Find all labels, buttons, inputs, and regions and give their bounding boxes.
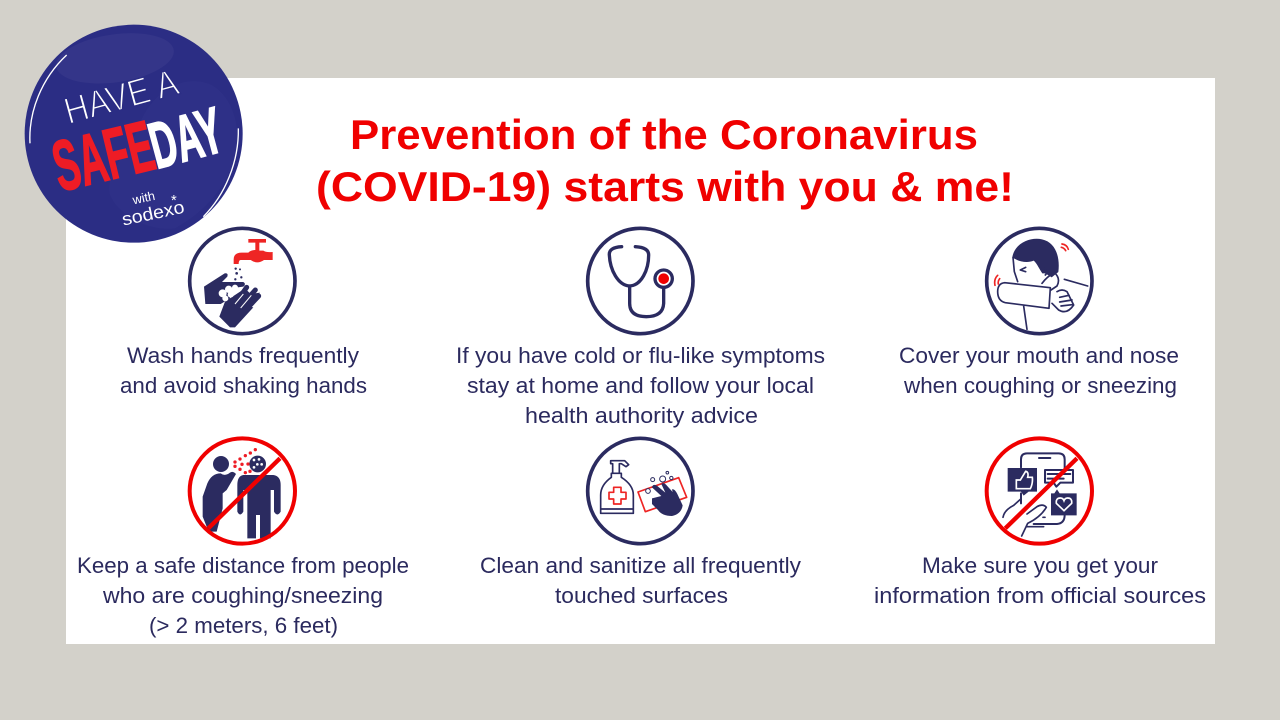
badge: Have a Safe Day with Sodexo: sodexo: [120, 197, 186, 230]
text: safe distance: Keep a safe distance from people: [77, 553, 409, 578]
icon: no close contact with coughing people: [190, 438, 295, 544]
text: stay at home: health authority advice: [525, 403, 758, 428]
text: cover mouth: Cover your mouth and nose: [899, 343, 1179, 368]
text: clean and sanitize: [480, 553, 801, 608]
text: stay at home: stay at home and follow your local: [467, 373, 814, 398]
text: cover mouth: [899, 343, 1179, 398]
badge: Have a Safe Day with Sodexo: *: [171, 193, 177, 209]
badge: Have a Safe Day with Sodexo: with: [130, 189, 156, 207]
text: wash hands: [120, 343, 367, 398]
title: Prevention of the Coronavirus: [350, 111, 978, 158]
text: clean and sanitize: Clean and sanitize all frequently: [480, 553, 801, 578]
text: safe distance: [77, 553, 409, 638]
text: official sources: [874, 553, 1206, 608]
text: clean and sanitize: touched surfaces: [555, 583, 728, 608]
text: wash hands: Wash hands frequently: [127, 343, 359, 368]
icon: social media misinformation: [987, 438, 1092, 544]
badge: Have a Safe Day with Sodexo: DAY: [142, 94, 231, 183]
text: stay at home: If you have cold or flu-like symptoms: [456, 343, 825, 368]
icon: coughing into elbow: [987, 228, 1092, 334]
icon: washing hands under tap: [190, 228, 295, 334]
text: official sources: Make sure you get your: [922, 553, 1158, 578]
badge: Have a Safe Day with Sodexo: [25, 25, 243, 243]
white content panel: [66, 78, 1215, 644]
badge: Have a Safe Day with Sodexo: HAVE A: [59, 61, 183, 132]
icon: stethoscope: [588, 228, 693, 334]
text: cover mouth: when coughing or sneezing: [903, 373, 1177, 398]
text: wash hands: and avoid shaking hands: [120, 373, 367, 398]
text: stay at home: [456, 343, 825, 428]
icon: sanitizer bottle and wiping: [588, 438, 693, 544]
title: [316, 111, 1014, 210]
title: (COVID-19) starts with you & me!: [316, 163, 1014, 210]
text: safe distance: (> 2 meters, 6 feet): [149, 613, 338, 638]
text: safe distance: who are coughing/sneezing: [102, 583, 383, 608]
text: official sources: information from official sources: [874, 583, 1206, 608]
badge: Have a Safe Day with Sodexo: SAFE: [45, 106, 162, 207]
